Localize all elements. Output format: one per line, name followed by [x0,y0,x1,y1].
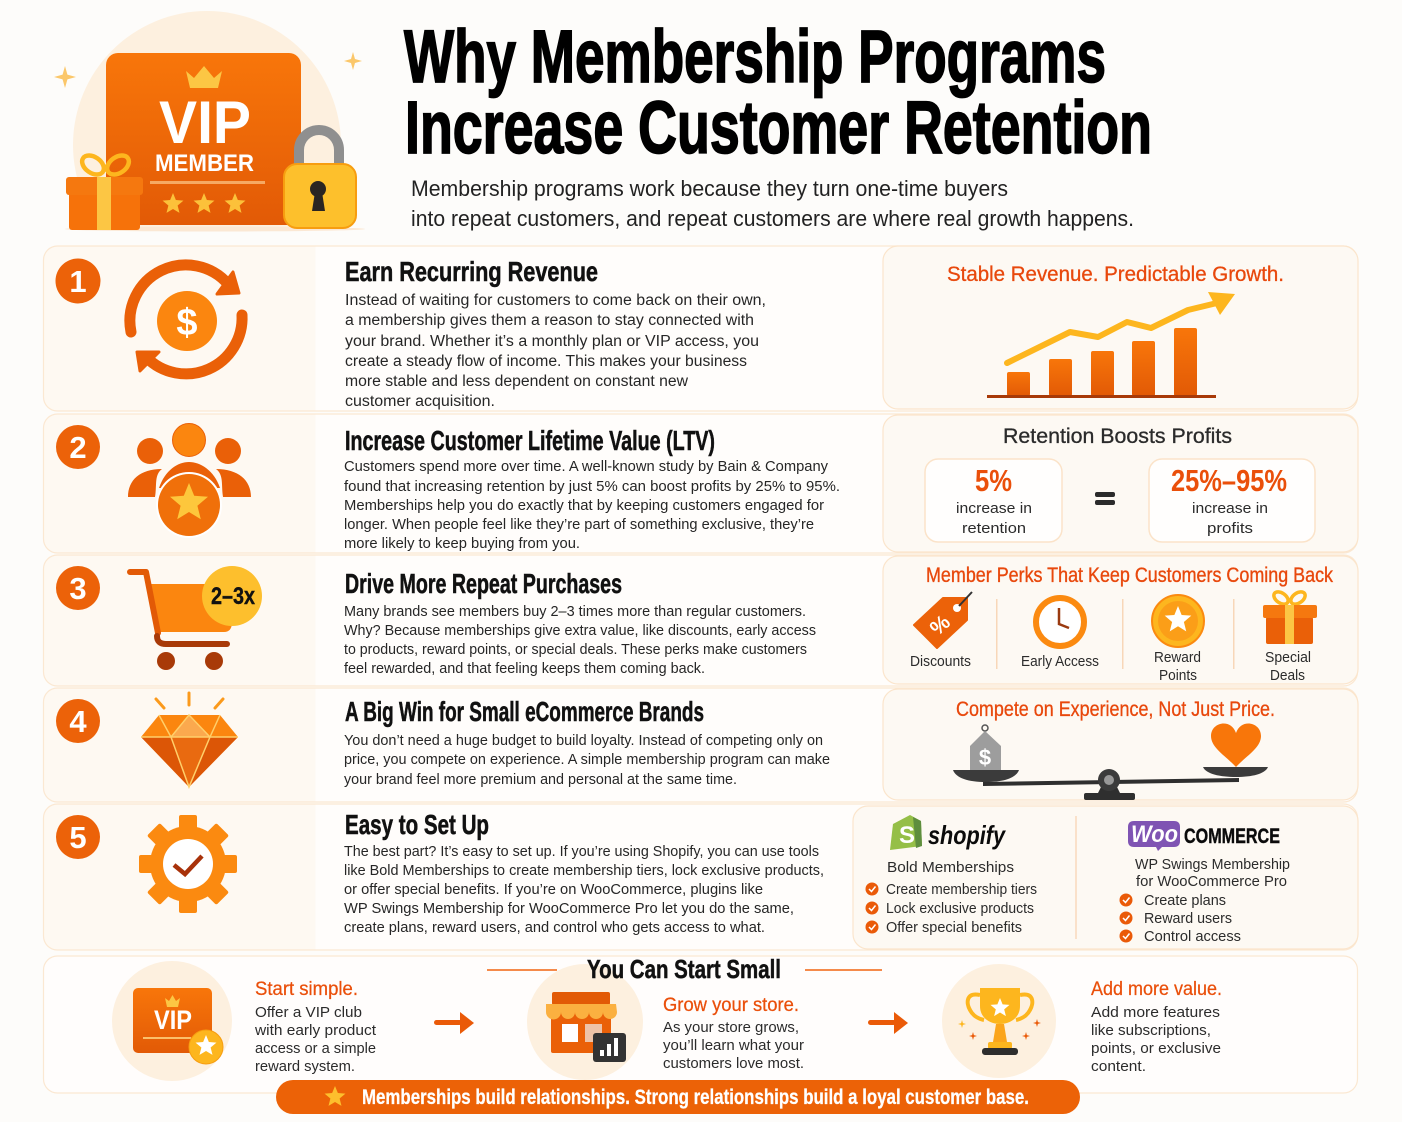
icon: crown [186,66,222,88]
body text: You don’t need a huge budget to build loyalty. Instead of competing only on [344,733,823,749]
balance scale [953,723,1268,800]
body text [345,292,766,410]
logo: woocommerce [1128,821,1280,851]
panel: row 4 small ecommerce brands [44,688,1358,802]
VIP text: VIP [159,89,251,156]
logo: woocommerce: Woo [1131,821,1178,848]
body text: found that increasing retention by just 5% can boost profits by 25% to 95%. [344,479,840,495]
panel heading: Member Perks That Keep Customers Coming Back [926,564,1333,587]
heading: Increase Customer Lifetime Value (LTV) [345,425,715,456]
step text: start simple [254,979,377,1075]
body text: Many brands see members buy 2–3 times more than regular customers. [344,604,806,620]
step text: add more value: like subscriptions, [1091,1022,1211,1039]
woocommerce list: Reward users [1144,911,1232,927]
banner text: Memberships build relationships. Strong relationships build a loyal customer base. [362,1086,1029,1109]
icon: recurring dollar [130,265,242,374]
body text: like Bold Memberships to create membership tiers, lock exclusive products, [344,863,824,879]
panel: row 3 repeat purchases [44,555,1358,686]
arrow [434,1012,474,1034]
step text: add more value [1091,979,1222,1075]
body text [344,604,816,677]
number badge 2: 2 [69,430,87,465]
number badge 5 [56,815,100,859]
title [404,15,1152,169]
body text: Memberships help you do exactly that by keeping customers engaged for [344,498,824,514]
heading: A Big Win for Small eCommerce Brands [345,696,704,727]
stat: 25%-95%: profits [1207,520,1253,537]
header illustration: VIP member card [54,11,365,232]
trend arrow [1007,292,1235,363]
woocommerce list: Create plans [1144,893,1226,909]
step text: start simple: Offer a VIP club [255,1004,362,1021]
icon: sparkle left [54,66,76,88]
step text: start simple: with early product [254,1022,377,1039]
panel: you can start small [44,954,1358,1093]
body text: to products, reward points, or special deals. These perks make customers [344,642,807,658]
panel: member perks [883,556,1358,684]
heading: Drive More Repeat Purchases [345,568,622,599]
perk: reward points: Reward [1154,650,1201,666]
woocommerce list: for WooCommerce Pro [1136,873,1287,890]
icon: diamond [141,693,238,787]
body text: a membership gives them a reason to stay connected with [345,312,754,329]
step text: start simple: Start simple. [255,979,358,1000]
body text: The best part? It’s easy to set up. If you’re using Shopify, you can use tools [344,844,819,860]
perk: reward points [1152,595,1204,684]
body text: your brand. Whether it’s a monthly plan or VIP access, you [345,333,759,350]
body text: Why? Because memberships give extra value, like discounts, early access [344,623,816,639]
body text [344,844,824,936]
subtitle [411,176,1134,231]
perk: special deals: Deals [1270,668,1305,684]
step text: start simple: access or a simple [255,1040,376,1057]
number badge 3: 3 [69,571,87,606]
bar chart [987,328,1216,398]
stat: 5% [925,459,1062,542]
step text: add more value: Add more value. [1091,979,1222,1000]
body text: more stable and less dependent on constant new [345,373,689,390]
number badge 1 [56,258,100,304]
panel: platforms [853,806,1358,949]
MEMBER text: MEMBER [155,150,254,177]
perk: discounts: Discounts [910,654,971,670]
body text: Customers spend more over time. A well-known study by Bain & Company [344,459,829,475]
stat: 25%-95%: 25%–95% [1171,463,1287,498]
step text: grow your store: Grow your store. [663,995,799,1016]
step text: add more value: Add more features [1091,1004,1220,1021]
step text: add more value: content. [1091,1058,1146,1075]
stat: 25%-95%: increase in [1192,500,1268,517]
number badge 3 [56,566,100,610]
perk: discounts [910,592,972,670]
panel heading: Retention Boosts Profits [1003,425,1232,448]
number badge 1: 1 [69,264,87,299]
panel heading: Compete on Experience, Not Just Price. [956,698,1275,721]
shopify list: Bold Memberships [887,859,1014,876]
logo: woocommerce: COMMERCE [1184,825,1280,848]
stat: 5%: increase in [956,500,1032,517]
perk: early access: Early Access [1021,654,1099,670]
panel: row 5 easy setup [44,804,1358,950]
stat: 25%-95% [1149,459,1315,542]
body text: longer. When people feel like they’re part of something exclusive, they’re [344,517,814,533]
step circle: store [527,964,643,1080]
body text: more likely to keep buying from you. [344,536,580,552]
number badge 5: 5 [69,820,87,855]
panel: row 1 recurring revenue [44,246,1358,411]
step text: grow your store [663,995,804,1072]
shopify list: Lock exclusive products [886,901,1034,917]
logo: shopify [890,815,1006,850]
icon: gear with check [139,815,237,913]
heading: Easy to Set Up [345,809,489,840]
woocommerce list [1120,856,1290,945]
title: Why Membership Programs [404,15,1106,98]
step text: add more value: points, or exclusive [1091,1040,1221,1057]
icon: padlock [284,130,356,228]
icon: banner star [325,1086,345,1106]
stat: 5%: retention [962,520,1026,537]
body text: price, you compete on experience. A simple membership program can make [344,752,830,768]
body text: customer acquisition. [345,393,495,410]
VIP card [106,53,301,225]
subtitle: into repeat customers, and repeat customers are where real growth happens. [411,206,1134,231]
section heading: You Can Start Small [587,954,781,984]
chart heading: Stable Revenue. Predictable Growth. [947,263,1284,286]
icon: shopping cart [130,566,262,670]
arrow [868,1012,908,1034]
shopify list: Offer special benefits [886,920,1022,936]
number badge 4: 4 [69,704,87,739]
balance scale: $ [979,745,991,770]
perk: special deals [1263,589,1317,684]
panel: growth chart [883,246,1358,409]
heading: Earn Recurring Revenue [345,256,598,287]
icon: gift box [66,152,143,230]
icon: sparkle right [344,52,362,70]
body text: WP Swings Membership for WooCommerce Pro let you do the same, [344,901,794,917]
panel: compete on experience [883,689,1358,800]
three stars [163,193,245,213]
panel: retention boosts profits [883,415,1358,552]
body text: create plans, reward users, and control who gets access to what. [344,920,765,936]
step circle: VIP: VIP [154,1005,192,1035]
banner: closing message [276,1080,1080,1114]
shopify list [866,859,1037,936]
panel: row 2 lifetime value [44,414,1358,553]
shopify list: Create membership tiers [886,882,1037,898]
body text: Instead of waiting for customers to come back on their own, [345,292,766,309]
perk: special deals: Special [1265,650,1311,666]
body text: feel rewarded, and that feeling keeps them coming back. [344,661,705,677]
body text [344,733,830,788]
step text: start simple: reward system. [255,1058,355,1075]
perk: reward points: Points [1159,668,1197,684]
woocommerce list: WP Swings Membership [1135,856,1290,873]
body text [344,459,840,552]
subtitle: Membership programs work because they turn one-time buyers [411,176,1008,201]
logo: shopify: shopify [928,820,1006,850]
equals sign [1095,492,1115,505]
stat: 5%: 5% [975,463,1012,498]
step text: grow your store: you’ll learn what your [663,1037,804,1054]
number badge 2 [56,425,100,469]
step text: grow your store: customers love most. [663,1055,804,1072]
body text: create a steady flow of income. This makes your business [345,353,747,370]
body text: or offer special benefits. If you’re on WooCommerce, plugins like [344,882,763,898]
perk: early access [1021,598,1099,670]
icon: members with star [128,424,251,538]
step text: grow your store: As your store grows, [663,1019,799,1036]
step circle: VIP [112,961,232,1081]
icon: recurring dollar: $ [176,302,198,344]
perk: discounts: % [926,610,955,640]
body text: your brand feel more premium and personal at the same time. [344,772,737,788]
number badge 4 [56,699,100,743]
icon: shopping cart: 2–3x [211,583,256,610]
logo: shopify: S [899,822,915,849]
step circle: trophy [942,964,1056,1078]
woocommerce list: Control access [1144,929,1241,945]
